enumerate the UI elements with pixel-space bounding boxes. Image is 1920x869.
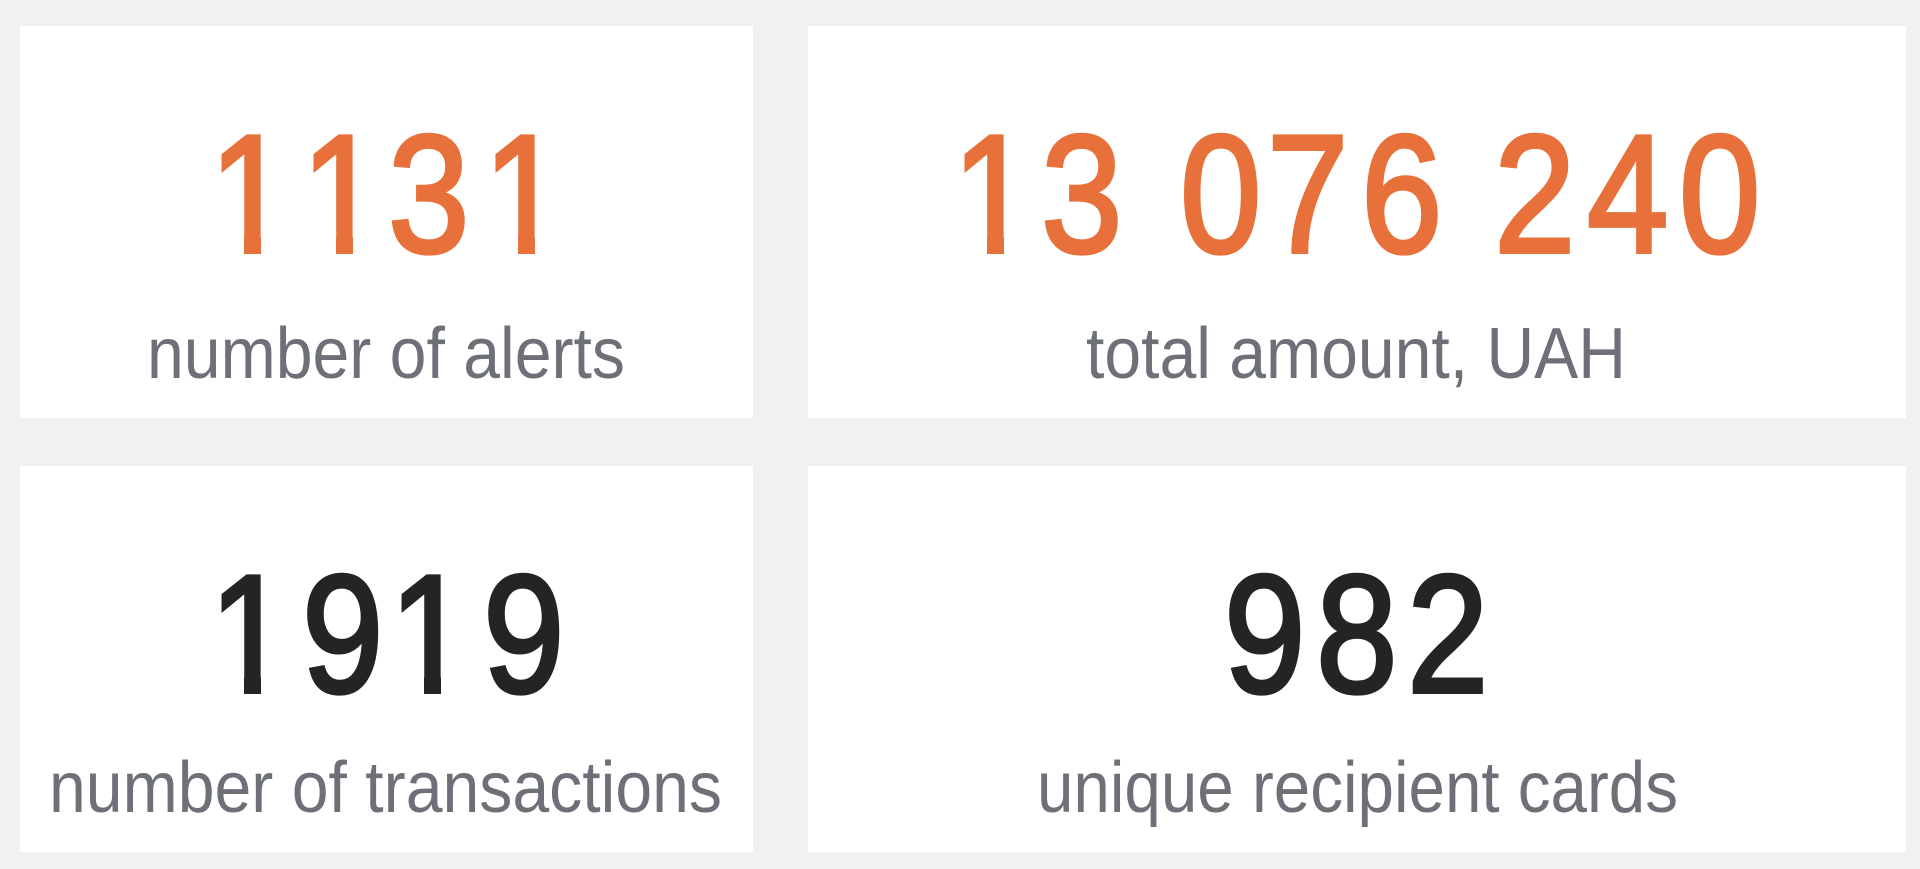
label: number of transactions: number of transactions [49, 748, 722, 828]
panel: total amount [808, 26, 1906, 418]
panel: number of alerts [20, 26, 753, 418]
label: total amount, UAH: total amount, UAH [1086, 314, 1626, 394]
value: 982: 982 [1224, 540, 1488, 728]
value: 1131: 1131 [209, 100, 564, 288]
label: unique recipient cards: unique recipient cards [1037, 748, 1678, 828]
value: 13 076 240: 13 076 240 [952, 100, 1760, 288]
panel: unique recipient cards [808, 466, 1906, 852]
value: 1919: 1919 [209, 540, 564, 728]
label: number of alerts: number of alerts [147, 314, 625, 394]
panel: number of transactions [20, 466, 753, 852]
